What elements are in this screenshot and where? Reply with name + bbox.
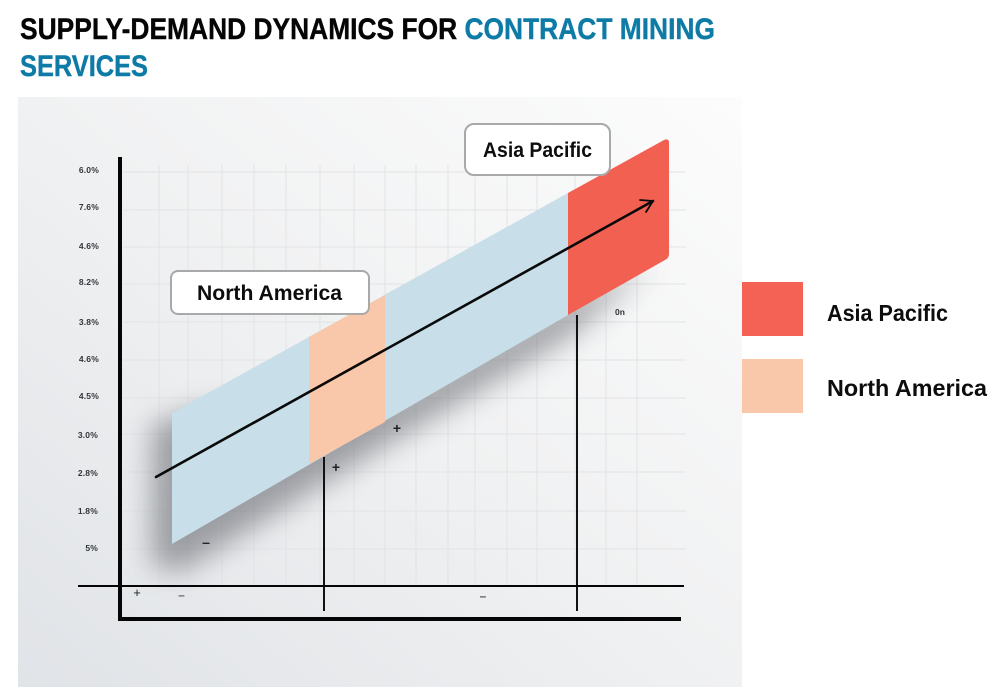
panel: chart background: [18, 97, 742, 687]
chart annotations: –: [480, 589, 487, 603]
chart annotations: –: [202, 534, 210, 550]
title: SUPPLY-DEMAND DYNAMICS FOR CONTRACT MINING: [20, 13, 715, 46]
chart grid: [123, 165, 686, 585]
legend label: Asia Pacific: Asia Pacific: [827, 300, 948, 326]
y axis tick labels: 8.2%: [79, 277, 99, 287]
callout: Asia Pacific: Asia Pacific: [483, 139, 592, 162]
y axis tick labels: 4.6%: [79, 241, 99, 251]
legend swatch: Asia Pacific: [742, 282, 803, 336]
band segment: Asia Pacific: [568, 139, 669, 315]
chart annotations: –: [178, 588, 185, 602]
axes: [78, 157, 684, 619]
legend swatch: North America: [742, 359, 803, 413]
y axis tick labels: 6.0%: [79, 165, 99, 175]
y axis tick labels: 3.0%: [78, 430, 98, 440]
y axis tick labels: 2.8%: [78, 468, 98, 478]
chart annotations: [133, 307, 625, 603]
vertical marker: North America: [323, 457, 325, 611]
title: SERVICES: [20, 50, 148, 83]
diagonal band: [172, 139, 669, 544]
legend label: North America: North America: [827, 375, 987, 401]
band segment: North America: [309, 295, 385, 464]
y axis tick labels: 3.8%: [79, 317, 99, 327]
y axis tick labels: 5%: [85, 543, 98, 553]
y axis tick labels: 7.6%: [79, 202, 99, 212]
chart annotations: 0n: [615, 307, 625, 317]
y axis tick labels: 4.6%: [79, 354, 99, 364]
callout: North America: North America: [197, 282, 342, 305]
callout: Asia Pacific: [465, 124, 610, 175]
band segment: blue: [172, 193, 568, 544]
title: [20, 13, 715, 83]
chart annotations: +: [133, 585, 141, 600]
band shadow: [152, 265, 650, 572]
trend arrow: [156, 200, 653, 477]
y axis tick labels: [78, 165, 99, 553]
legend: [742, 282, 987, 413]
y axis tick labels: 4.5%: [79, 391, 99, 401]
callout: North America: [171, 271, 369, 314]
chart annotations: +: [332, 459, 340, 475]
y axis tick labels: 1.8%: [78, 506, 98, 516]
chart annotations: +: [393, 420, 401, 436]
vertical marker: Asia Pacific: [576, 315, 578, 611]
